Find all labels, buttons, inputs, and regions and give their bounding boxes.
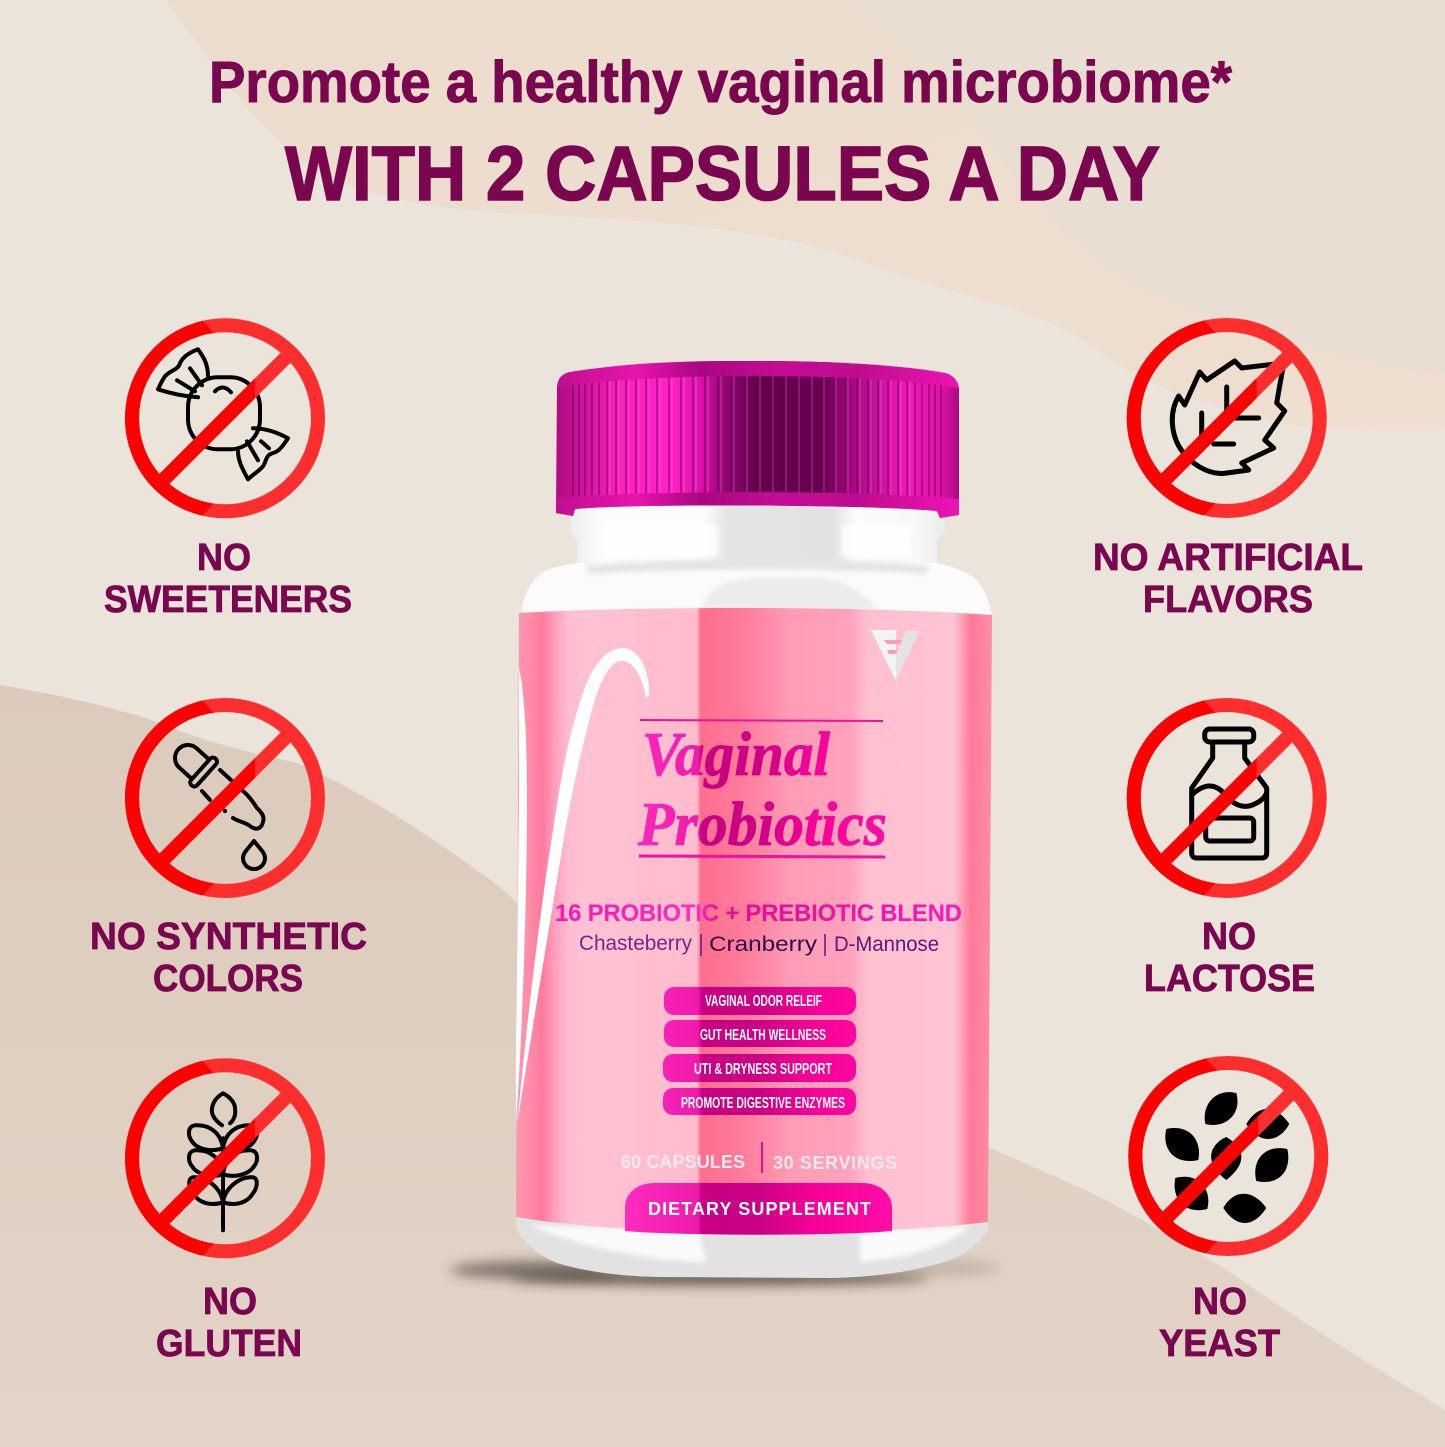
product name: Probiotics (637, 791, 887, 859)
benefit pills: VAGINAL ODOR RELEIF (705, 993, 822, 1010)
label: no yeast (1159, 1281, 1280, 1365)
benefit pills: UTI & DRYNESS SUPPORT (694, 1061, 832, 1078)
ingredients: Chasteberry (579, 932, 692, 955)
benefit pills (663, 987, 856, 1115)
item: no artificial flavors (1093, 325, 1363, 621)
item: no lactose (1134, 705, 1320, 1000)
label: no lactose: NO (1202, 916, 1256, 958)
white swoosh (517, 648, 649, 1125)
label: no gluten: NO (203, 1281, 257, 1323)
heading: Promote a healthy vaginal microbiome* (209, 50, 1232, 115)
product name (637, 720, 887, 859)
product name: Vaginal (642, 721, 831, 789)
item: no gluten (132, 1065, 318, 1365)
ingredients: D-Mannose (834, 933, 939, 956)
label: no synthetic colors (90, 916, 367, 1000)
item: no yeast (1135, 1063, 1321, 1365)
bottle label (516, 608, 992, 1233)
ingredients (579, 932, 939, 956)
capsule count: 60 CAPSULES (621, 1152, 745, 1172)
label: no artificial flavors (1093, 537, 1363, 621)
bottle cap (556, 361, 959, 518)
label: no yeast: NO (1193, 1281, 1247, 1323)
label: no lactose (1144, 916, 1315, 1000)
icon: leaf (1134, 325, 1320, 511)
label: no sweeteners (104, 537, 352, 621)
icon: dropper (132, 705, 318, 891)
icon: wheat (132, 1065, 318, 1251)
bottle shoulder and body (516, 563, 992, 1278)
bottle neck (570, 505, 945, 565)
dietary supplement tab (625, 1183, 892, 1235)
benefit pills: PROMOTE DIGESTIVE ENZYMES (681, 1095, 845, 1112)
item: no sweeteners (104, 325, 352, 621)
product bottle (516, 361, 992, 1278)
label: no gluten: GLUTEN (156, 1323, 302, 1365)
label: no synthetic colors: COLORS (153, 958, 303, 1000)
brand logo: FYVUS (870, 687, 922, 694)
item: no synthetic colors (90, 705, 367, 1000)
label: no gluten (156, 1281, 302, 1365)
label: no synthetic colors: NO SYNTHETIC (90, 916, 367, 958)
label: no artificial flavors: FLAVORS (1143, 579, 1313, 621)
icon: candy (132, 325, 318, 511)
label: no sweeteners: NO (197, 537, 251, 579)
benefit pills: GUT HEALTH WELLNESS (700, 1027, 826, 1044)
icon: seeds (1135, 1063, 1321, 1249)
blend headline: 16 PROBIOTIC + PREBIOTIC BLEND (555, 900, 962, 927)
label: no sweeteners: SWEETENERS (104, 579, 352, 621)
label: no artificial flavors: NO ARTIFICIAL (1093, 537, 1363, 579)
capsule count (621, 1142, 897, 1173)
heading (209, 50, 1232, 217)
label: no yeast: YEAST (1159, 1323, 1280, 1365)
dietary supplement tab: DIETARY SUPPLEMENT (648, 1199, 871, 1219)
icon: milk bottle (1134, 705, 1320, 891)
brand logo (870, 630, 922, 694)
ingredients: Cranberry (709, 933, 818, 956)
heading: WITH 2 CAPSULES A DAY (285, 131, 1160, 217)
capsule count: 30 SERVINGS (773, 1153, 897, 1173)
label: no lactose: LACTOSE (1144, 958, 1315, 1000)
bottle shadow (450, 1260, 1000, 1285)
